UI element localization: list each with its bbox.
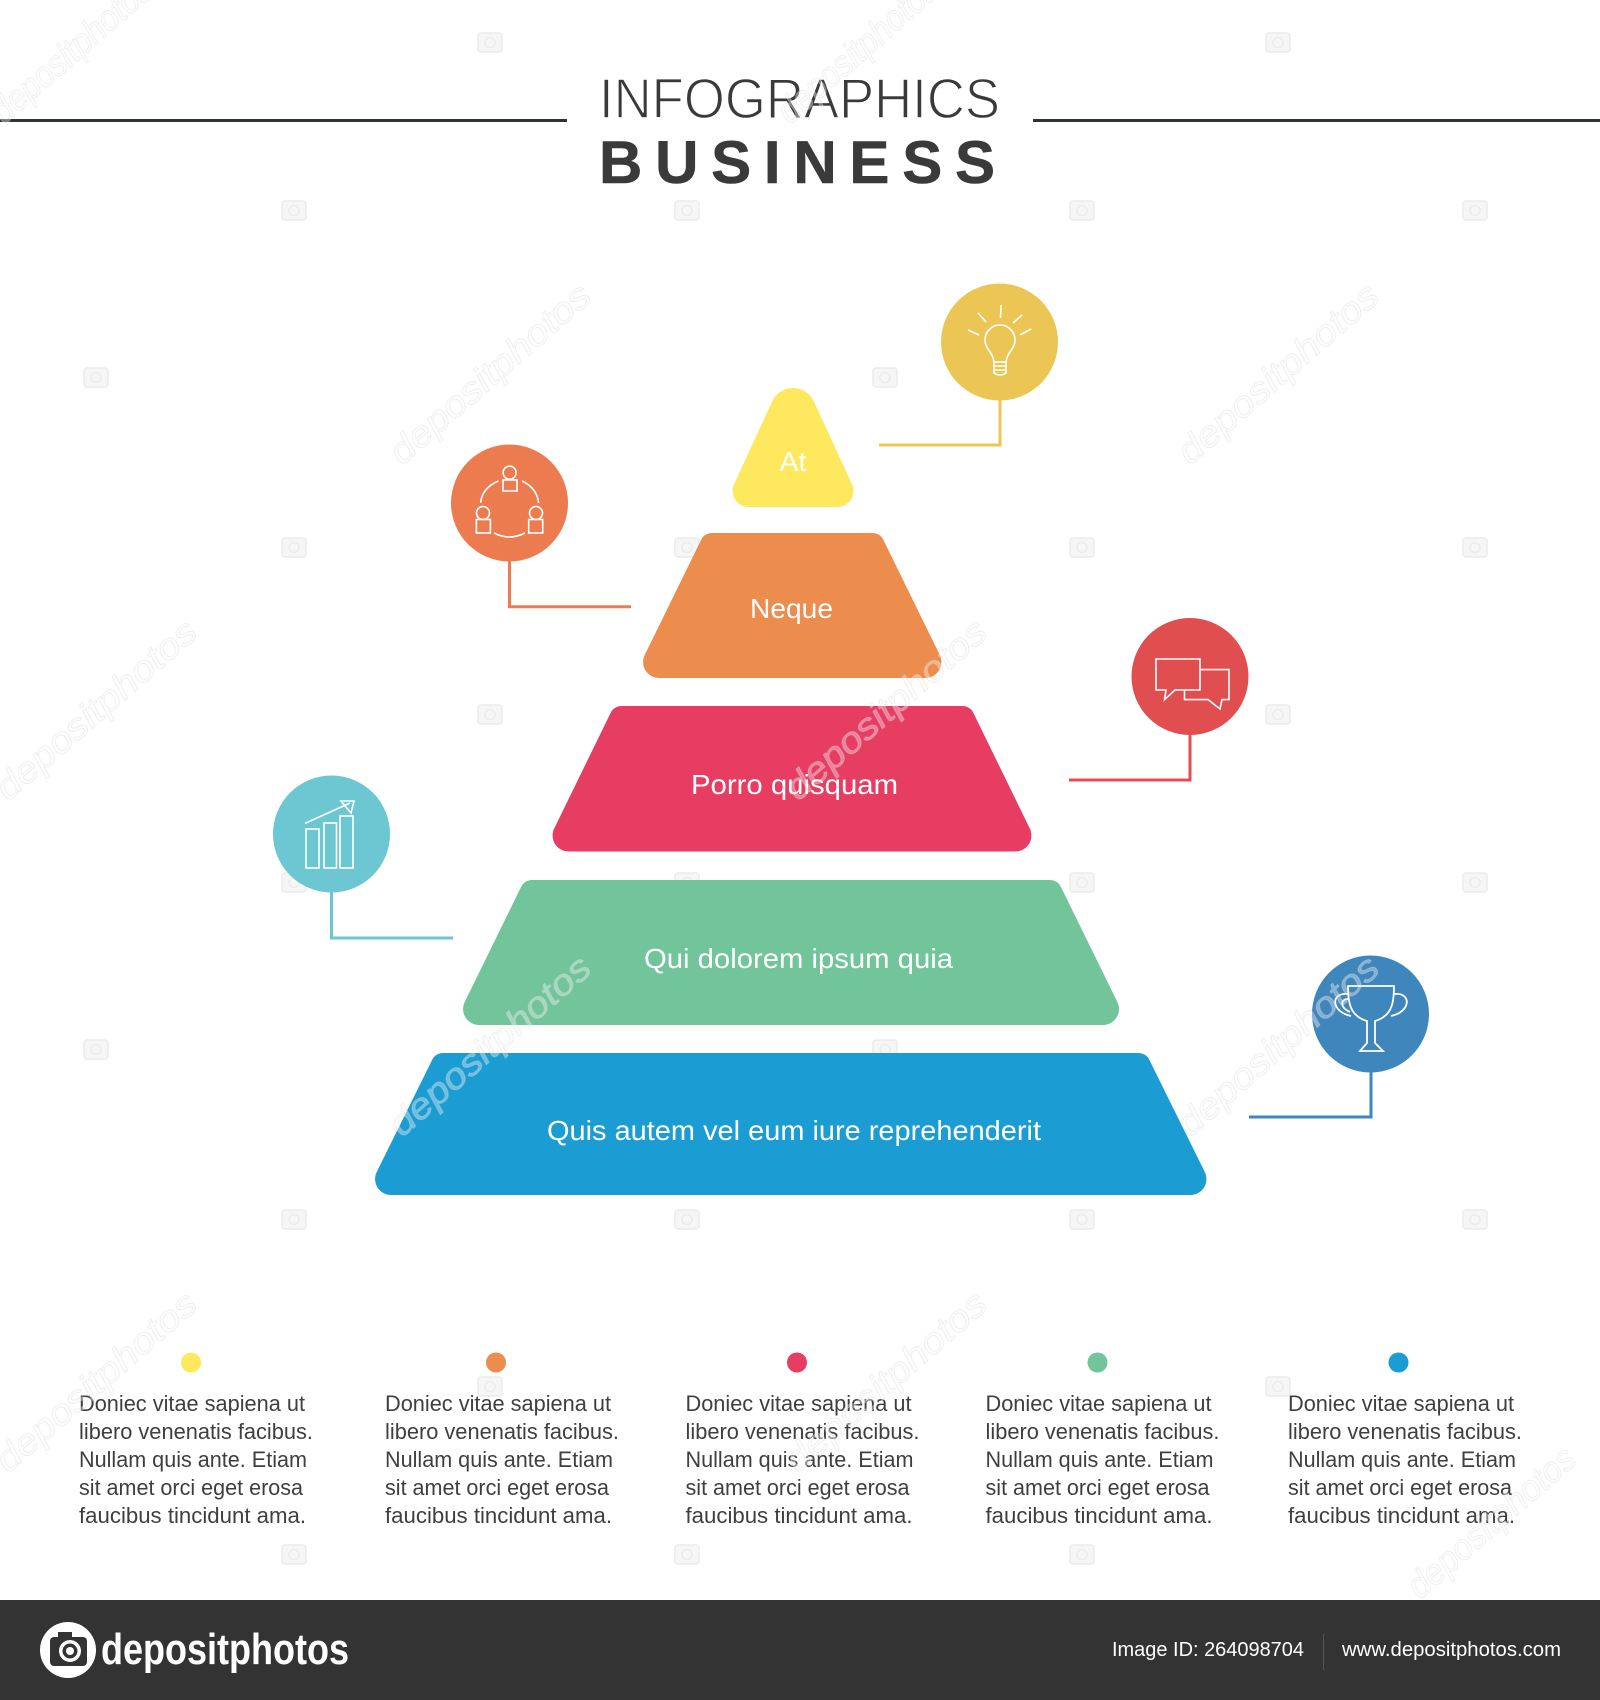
legend column 4: faucibus tincidunt ama. bbox=[986, 1503, 1212, 1528]
legend column 5: libero venenatis facibus. bbox=[1288, 1419, 1522, 1444]
watermark overlay: depositphotos bbox=[776, 1282, 995, 1480]
legend column 5: Doniec vitae sapiena ut bbox=[1288, 1391, 1514, 1416]
legend column 2: faucibus tincidunt ama. bbox=[385, 1503, 612, 1528]
watermark overlay: depositphotos bbox=[380, 946, 599, 1144]
legend dot blue bbox=[1388, 1352, 1408, 1372]
watermark overlay: depositphotos bbox=[1168, 274, 1387, 472]
footer logo wordmark: depositphotos bbox=[101, 1625, 349, 1674]
legend column 4: Doniec vitae sapiena ut bbox=[986, 1391, 1212, 1416]
callout: red chat bbox=[1069, 618, 1248, 780]
icon: speech bubbles bbox=[1156, 659, 1229, 709]
legend column 3: sit amet orci eget erosa bbox=[686, 1475, 910, 1500]
pyramid tier: Porro quisquam bbox=[553, 706, 1031, 852]
pyramid tier: Quis autem vel eum iure reprehenderit bbox=[375, 1053, 1206, 1195]
legend column 1: libero venenatis facibus. bbox=[79, 1419, 313, 1444]
footer logo icon: camera bbox=[40, 1622, 96, 1678]
legend dot red bbox=[787, 1352, 807, 1372]
pyramid tier: Neque bbox=[643, 533, 941, 678]
legend column 3: Nullam quis ante. Etiam bbox=[686, 1447, 914, 1472]
pyramid tier: Quis autem vel eum iure reprehenderit: Quis autem vel eum iure reprehenderit bbox=[547, 1115, 1041, 1146]
legend column 2: Doniec vitae sapiena ut bbox=[385, 1391, 611, 1416]
callout: orange team bbox=[451, 444, 631, 607]
pyramid tier: Neque: Neque bbox=[750, 593, 833, 624]
legend column 3: faucibus tincidunt ama. bbox=[686, 1503, 912, 1528]
legend column 4: libero venenatis facibus. bbox=[986, 1419, 1220, 1444]
legend column 5: sit amet orci eget erosa bbox=[1288, 1475, 1513, 1500]
pyramid tier: Qui dolorem ipsum quia bbox=[463, 880, 1119, 1025]
watermark overlay: depositphotos bbox=[380, 274, 599, 472]
title line one: INFOGRAPHICS bbox=[599, 67, 1000, 131]
legend dot yellow bbox=[181, 1352, 201, 1372]
icon: team cycle bbox=[476, 466, 543, 537]
legend column 5: faucibus tincidunt ama. bbox=[1288, 1503, 1515, 1528]
legend column 1: sit amet orci eget erosa bbox=[79, 1475, 304, 1500]
callout: teal growth chart bbox=[273, 776, 453, 938]
legend column 2: Nullam quis ante. Etiam bbox=[385, 1447, 613, 1472]
watermark camera marks bbox=[84, 33, 1487, 1564]
watermark overlay: depositphotos bbox=[1168, 946, 1387, 1144]
legend column 2: libero venenatis facibus. bbox=[385, 1419, 619, 1444]
watermark overlay: depositphotos bbox=[1398, 1437, 1584, 1606]
pyramid tier: At bbox=[733, 388, 853, 507]
title header bbox=[0, 67, 1600, 196]
legend column 3: Doniec vitae sapiena ut bbox=[686, 1391, 912, 1416]
legend column 4: sit amet orci eget erosa bbox=[986, 1475, 1210, 1500]
footer url: www.depositphotos.com bbox=[1341, 1639, 1561, 1661]
callout: blue trophy bbox=[1249, 956, 1429, 1117]
title line two: BUSINESS bbox=[599, 129, 995, 196]
legend column 1: Nullam quis ante. Etiam bbox=[79, 1447, 307, 1472]
pyramid bbox=[375, 388, 1206, 1195]
legend column 1: faucibus tincidunt ama. bbox=[79, 1503, 306, 1528]
legend column 2 bbox=[385, 1352, 619, 1528]
callout: yellow lightbulb bbox=[879, 284, 1058, 445]
legend column 3 bbox=[686, 1352, 920, 1528]
legend column 1: Doniec vitae sapiena ut bbox=[79, 1391, 305, 1416]
legend column 1 bbox=[79, 1352, 313, 1528]
footer bar bbox=[0, 1600, 1600, 1700]
pyramid tier: Qui dolorem ipsum quia: Qui dolorem ipsum quia bbox=[644, 943, 953, 974]
legend dot orange bbox=[486, 1352, 506, 1372]
legend dot green bbox=[1088, 1352, 1108, 1372]
legend column 4: Nullam quis ante. Etiam bbox=[986, 1447, 1214, 1472]
icon: trophy bbox=[1335, 986, 1407, 1051]
legend column 3: libero venenatis facibus. bbox=[686, 1419, 920, 1444]
pyramid tier: Porro quisquam: Porro quisquam bbox=[691, 769, 898, 800]
legend column 5: Nullam quis ante. Etiam bbox=[1288, 1447, 1516, 1472]
icon: lightbulb bbox=[968, 305, 1031, 375]
legend column 5 bbox=[1288, 1352, 1522, 1528]
legend column 4 bbox=[986, 1352, 1220, 1528]
footer image id: Image ID: 264098704 bbox=[1112, 1639, 1304, 1661]
icon: growth bars bbox=[305, 801, 354, 868]
pyramid tier: At: At bbox=[780, 446, 807, 477]
legend column 2: sit amet orci eget erosa bbox=[385, 1475, 610, 1500]
watermark overlay: depositphotos bbox=[776, 610, 995, 808]
